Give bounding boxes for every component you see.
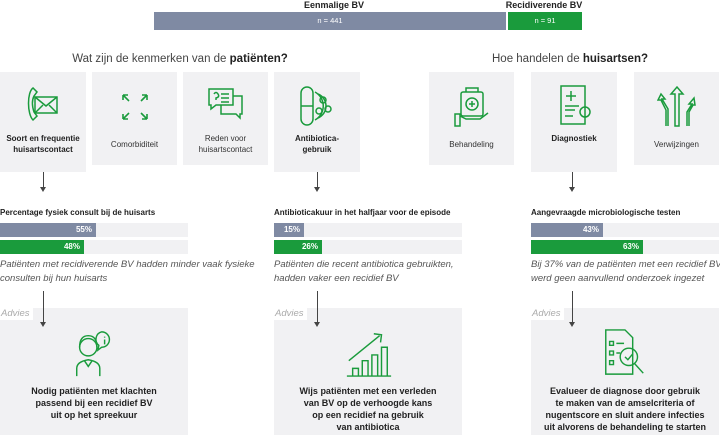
card: verwijzingen	[634, 72, 719, 165]
chart: microbiologische testen	[531, 208, 720, 284]
chart: fysiek consult: Patiënten met recidiverende BV hadden minder vaak fysieke consulten bij hun huisarts	[0, 259, 255, 284]
advice box 1	[0, 308, 188, 435]
icon: diverging arrows	[657, 86, 696, 127]
bar: eenmalig: n = 441	[317, 16, 343, 25]
card: antibioticagebruik: Antibiotica-	[295, 134, 339, 143]
text: Advies	[275, 308, 304, 319]
arrows: conclusions to advice	[40, 291, 575, 327]
icon: document with magnifier	[605, 329, 644, 375]
chart: microbiologische testen: Bij 37% van de patiënten met een recidief BV	[531, 259, 720, 270]
card: comorbiditeit: Comorbiditeit	[111, 140, 158, 149]
chart: microbiologische testen: werd geen aanvullend onderzoek ingezet	[531, 273, 704, 284]
chart: microbiologische testen: 63%	[623, 242, 639, 251]
chart: antibioticakuur	[274, 208, 462, 284]
advice box 3: nugentscore en sluit andere infecties	[545, 410, 705, 420]
header: group labels: Recidiverende BV	[506, 0, 582, 10]
advice box 2	[274, 308, 462, 435]
chart: microbiologische testen: 43%	[583, 225, 599, 234]
chart: antibioticakuur: Patiënten die recent antibiotica gebruikten,	[274, 259, 454, 270]
card: verwijzingen: Verwijzingen	[654, 140, 699, 149]
advice box 3: Evalueer de diagnose door gebruik	[550, 386, 700, 396]
chart: fysiek consult: 55%	[76, 225, 92, 234]
card: reden voor huisartscontact	[183, 72, 268, 165]
advice box 2: van BV op de verhoogde kans	[304, 398, 432, 408]
card: reden voor huisartscontact: Reden voor	[205, 134, 246, 143]
chart: fysiek consult	[0, 208, 255, 284]
chart: antibioticakuur: hadden vaker een recidief BV	[274, 273, 399, 284]
chart: microbiologische testen: Aangevraagde microbiologische testen	[531, 208, 680, 217]
heading: patiënten: Wat zijn de kenmerken van de patiënten?	[72, 53, 288, 65]
chart: antibioticakuur: 15%	[284, 225, 300, 234]
card: comorbiditeit	[92, 72, 177, 165]
card: diagnostiek	[531, 72, 617, 172]
advice box 1: passend bij een recidief BV	[35, 398, 153, 408]
advice box 1: uit op het spreekuur	[51, 410, 137, 420]
card: antibioticagebruik	[274, 72, 360, 172]
advice box 3	[531, 308, 719, 435]
advies labels: Advies	[1, 308, 30, 319]
advice box 2: op een recidief na gebruik	[312, 410, 424, 420]
advice box 3: te maken van de amselcriteria of	[555, 398, 695, 408]
card: antibioticagebruik: gebruik	[303, 145, 331, 154]
chart: antibioticakuur: 26%	[302, 242, 318, 251]
heading: huisartsen: Hoe handelen de huisartsen?	[492, 53, 648, 65]
header: group labels: Eenmalige BV	[304, 0, 364, 10]
card: soort en frequentie	[0, 72, 86, 172]
icon: chat bubbles	[208, 88, 243, 120]
icon: bar chart growth	[346, 333, 392, 377]
advice box 1: Nodig patiënten met klachten	[31, 386, 157, 396]
icon: medical kit on hand	[454, 87, 488, 127]
card: soort en frequentie: huisartscontact	[13, 145, 73, 154]
icon: pill and petri dish	[300, 86, 332, 126]
bar: recidiverend: n = 91	[534, 16, 556, 25]
bar: recidiverend	[508, 12, 582, 30]
card: reden voor huisartscontact: huisartscontact	[199, 145, 252, 154]
card: soort en frequentie: Soort en frequentie	[6, 134, 80, 143]
card: behandeling: Behandeling	[449, 140, 494, 149]
text: Advies	[532, 308, 561, 319]
header: group labels	[154, 0, 582, 30]
advice box 2: Wijs patiënten met een verleden	[300, 386, 436, 396]
icon: phone envelope	[28, 87, 58, 121]
chart: antibioticakuur: Antibioticakuur in het halfjaar voor de episode	[274, 208, 450, 217]
card: behandeling	[429, 72, 514, 165]
arrows: cards to charts	[40, 172, 575, 192]
advice box 3: uit alvorens de behandeling te starten	[544, 422, 706, 432]
chart: fysiek consult: Percentage fysiek consult bij de huisarts	[0, 208, 155, 217]
icon: arrows	[122, 94, 148, 120]
chart: fysiek consult: 48%	[64, 242, 80, 251]
advice box 2: van antibiotica	[336, 422, 400, 432]
bar: eenmalig	[154, 12, 506, 30]
card: diagnostiek: Diagnostiek	[551, 134, 597, 143]
icon: doctor with info	[76, 331, 110, 376]
icon: medical report	[560, 85, 591, 125]
